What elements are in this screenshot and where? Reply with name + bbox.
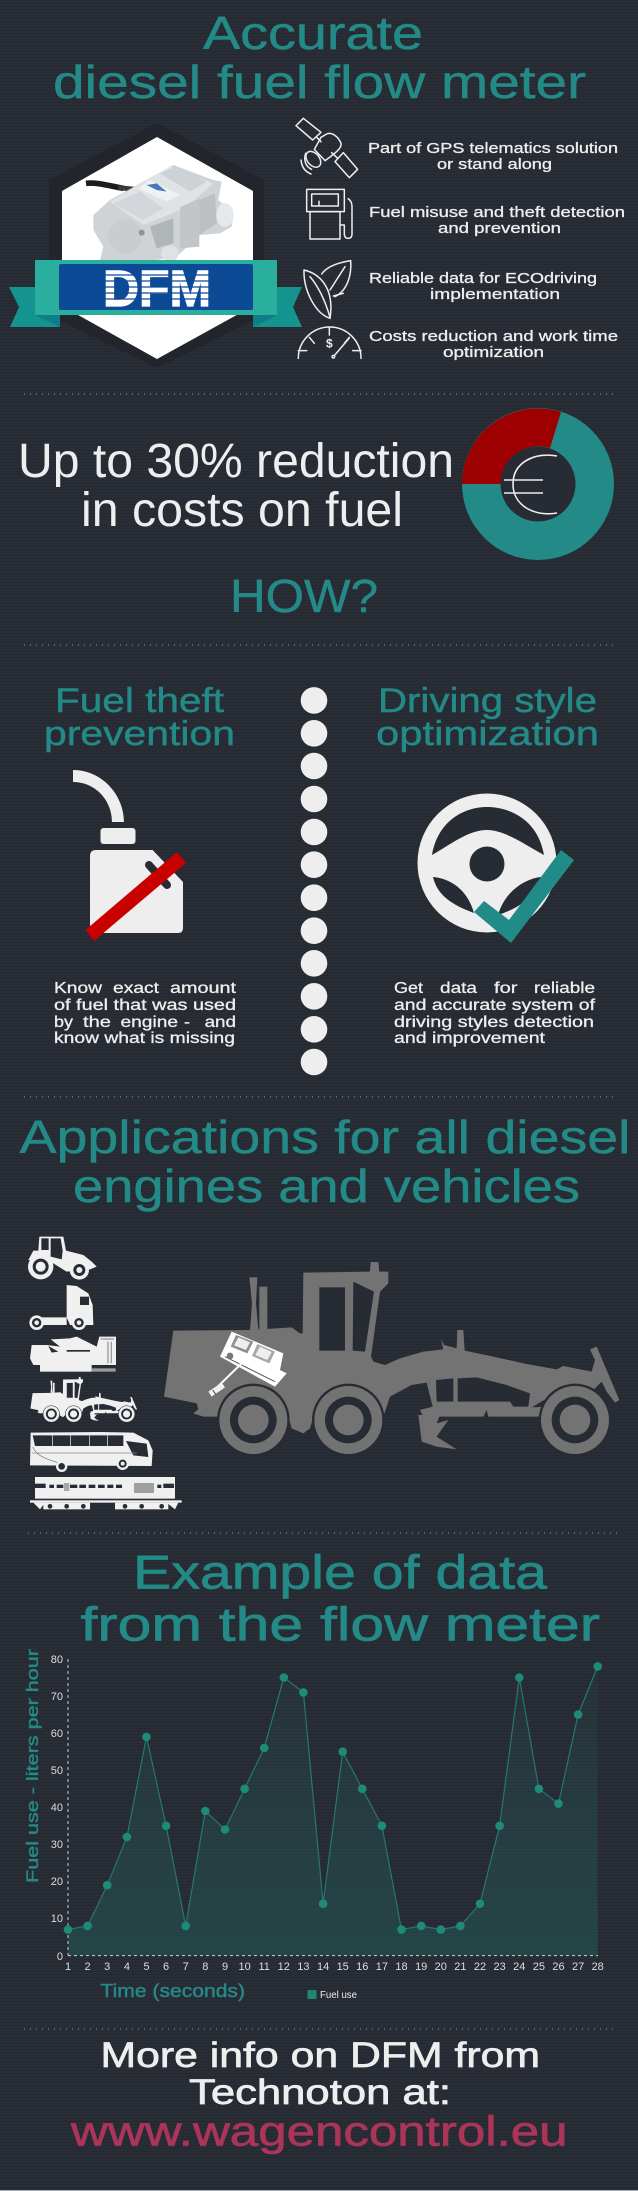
description: Know [54,980,103,997]
y axis labels: 40 [51,1802,63,1814]
x axis labels: 22 [474,1961,486,1973]
heading: Driving style [378,682,597,720]
description [54,980,237,1047]
icon: truck [29,1285,93,1330]
description: amount [170,980,237,997]
heading [376,682,599,753]
DFM logo: DFM [103,260,211,317]
x axis labels: 10 [238,1961,251,1973]
title: diesel fuel flow meter [53,56,586,108]
x axis labels: 21 [454,1961,467,1973]
donut chart with euro [462,408,614,560]
feature text: ECOdriving [369,271,597,303]
feature text: ECOdriving: Reliable data for ECOdriving [369,271,597,287]
x axis labels: 1 [65,1961,71,1973]
applications heading: engines and vehicles [73,1160,580,1212]
x axis labels: 7 [183,1961,189,1973]
more info call to action: Technoton at: [189,2073,451,2112]
x axis labels: 14 [317,1961,329,1973]
ribbon [35,260,277,315]
description: reliable [534,980,595,997]
title: Accurate [203,7,423,59]
feature text: GPS: Part of GPS telematics solution [368,141,618,157]
dotted column divider [301,687,327,1075]
description: by [54,1014,73,1031]
icon: leaves [304,261,351,318]
x axis labels: 11 [258,1961,270,1973]
y axis labels: 50 [51,1765,63,1777]
icon: gauge: $ [326,336,333,350]
cost reduction headline [18,435,454,537]
description: exact [113,980,160,997]
description: the [83,1014,111,1031]
grader silhouette [164,1262,619,1456]
feature text: ECOdriving: implementation [430,287,560,303]
applications heading [20,1111,630,1212]
icon: generator [30,1337,116,1372]
icon: locomotive [30,1477,182,1509]
HOW heading: HOW? [230,570,378,622]
y axis labels: 20 [51,1876,63,1888]
description: data [440,980,477,997]
x axis labels: 26 [552,1961,565,1973]
x axis labels: 16 [356,1961,368,1973]
icon: fuel pump [307,189,352,239]
flow meter on engine [208,1332,287,1397]
y axis labels: 10 [51,1913,63,1925]
x axis labels: 2 [85,1961,91,1973]
x axis labels: 20 [435,1961,447,1973]
y axis labels: 80 [51,1654,63,1666]
cost reduction headline: in costs on fuel [81,484,403,537]
x axis labels: 8 [202,1961,208,1973]
more info call to action: More info on DFM from [100,2036,540,2075]
data example heading [80,1546,600,1651]
feature text: costs [369,329,618,361]
feature text: costs: Costs reduction and work time [369,329,618,345]
x axis labels: 5 [143,1961,150,1973]
description: and [205,1014,236,1031]
description: engine [120,1014,178,1031]
vehicle icon list [28,1237,182,1509]
x axis labels: 9 [222,1961,228,1973]
grader with flow meter [164,1262,619,1456]
y axis labels: 30 [51,1839,63,1851]
description: of fuel that was used [54,997,236,1014]
icon: steering wheel with check [418,794,574,943]
feature text: GPS [368,141,618,173]
x axis labels: 13 [297,1961,310,1973]
x axis labels: 4 [124,1961,130,1973]
heading [44,682,235,753]
cost reduction headline: Up to 30% reduction [18,435,454,488]
applications heading: Applications for all diesel [20,1111,630,1163]
more info call to action [70,2036,568,2155]
x axis labels: 15 [337,1961,349,1973]
feature list [296,118,625,361]
product badge [9,123,302,368]
icon: small grader [30,1377,137,1422]
website link: www.wagencontrol.eu [70,2108,568,2155]
x axis labels: 3 [104,1961,110,1973]
description [394,980,596,1047]
heading: optimization [376,715,599,753]
y axis labels [51,1654,63,1963]
description: Get [394,980,424,997]
feature text: fuel misuse [369,205,625,237]
x axis labels: 23 [493,1961,506,1973]
x axis labels: 6 [163,1961,169,1973]
data points [64,1662,602,1934]
feature text: costs: optimization [443,345,544,361]
heading: prevention [44,715,235,753]
description: know what is missing [54,1030,235,1047]
x axis labels: 17 [376,1961,388,1973]
icon: jerry can crossed [73,770,186,941]
title [53,7,586,108]
x axis labels: 19 [415,1961,427,1973]
description: and accurate system of [394,997,596,1014]
DFM logo [59,260,253,317]
description: for [494,980,518,997]
panel: driving style optimization [376,682,599,1047]
x axis labels: 24 [513,1961,525,1973]
flow meter device [86,165,234,261]
legend: Fuel use [320,1990,357,2001]
x axis labels: 12 [278,1961,290,1973]
x axis labels: 18 [395,1961,408,1973]
data example heading: from the flow meter [80,1598,600,1651]
panel: fuel theft prevention [44,682,237,1047]
description: - [184,1014,190,1031]
y axis labels: 60 [51,1728,63,1740]
y axis title: Fuel use - liters per hour [23,1649,42,1883]
icon: bus [30,1432,153,1472]
y axis labels: 0 [57,1951,63,1963]
description: driving styles detection [394,1014,594,1031]
icon: gauge [298,327,361,358]
feature text: fuel misuse: Fuel misuse and theft detection [369,205,625,221]
x axis labels [65,1961,604,1973]
x axis labels: 28 [592,1961,604,1973]
heading: Fuel theft [55,682,225,720]
data example heading: Example of data [133,1546,548,1598]
description: and improvement [394,1030,546,1047]
icon: tractor [28,1237,97,1280]
x axis labels: 25 [533,1961,545,1973]
area chart: fuel use [23,1649,604,2001]
axes [68,1659,598,1956]
feature text: fuel misuse: and prevention [438,221,561,237]
icon: satellite [296,118,358,178]
y axis labels: 70 [51,1691,63,1703]
x axis labels: 27 [572,1961,584,1973]
x axis title: Time (seconds) [100,1980,245,2001]
icon: euro [504,455,557,514]
chart line [68,1666,598,1930]
feature text: GPS: or stand along [437,157,552,173]
chart area [68,1666,598,1956]
ribbon tails [9,287,60,327]
